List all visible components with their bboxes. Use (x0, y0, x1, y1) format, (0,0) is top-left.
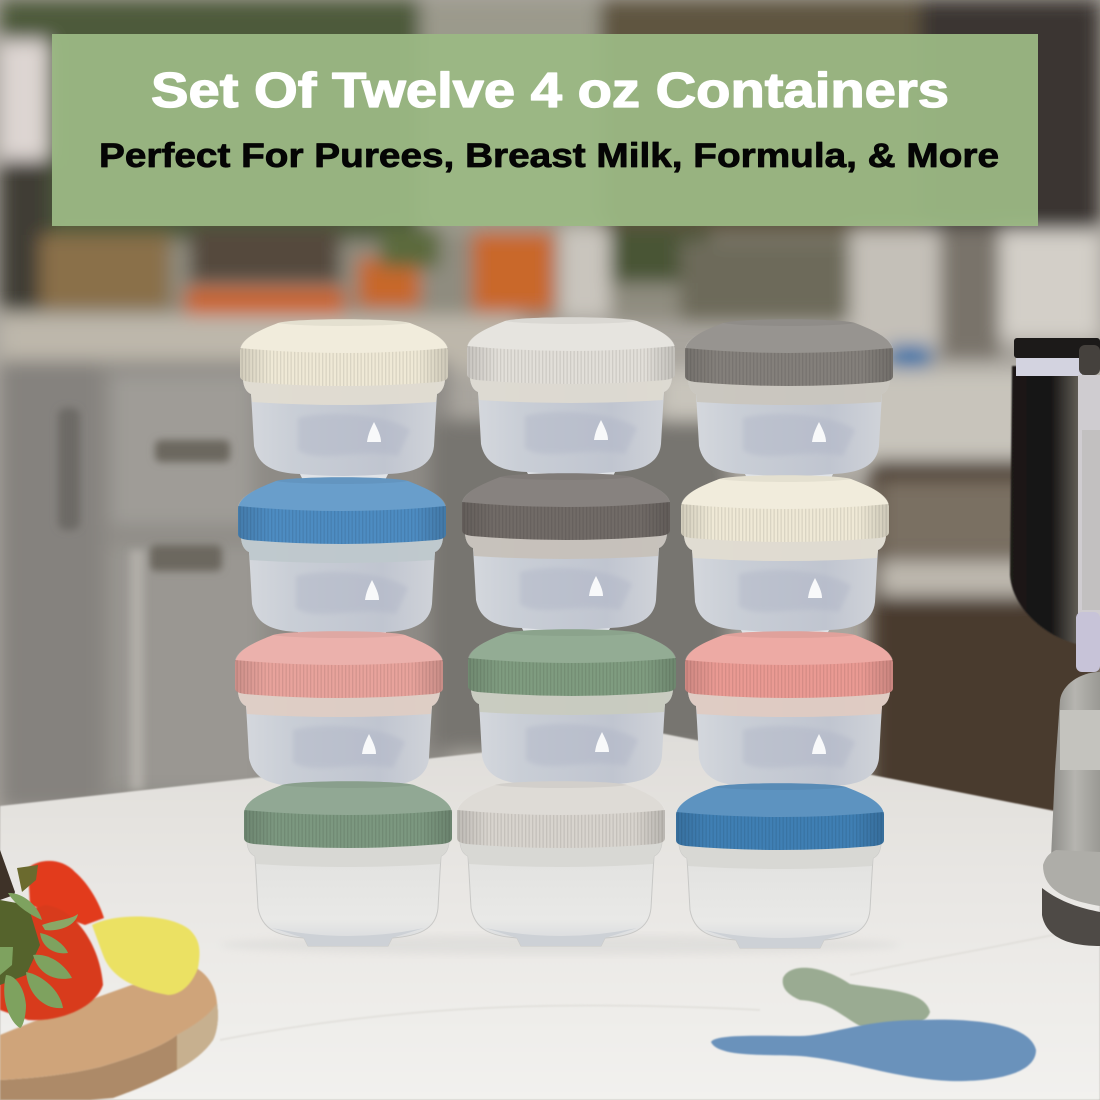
container: row 4 light gray (457, 781, 665, 946)
container: row 4 green (244, 781, 452, 946)
banner panel (52, 34, 1038, 226)
strawberry leaves (0, 850, 78, 1028)
container: row 4 blue (676, 783, 884, 948)
container stacks (235, 317, 893, 948)
container: row 3 pink (235, 631, 443, 794)
container: row 3 green (468, 629, 676, 792)
blue silicone spoon (711, 1020, 1036, 1081)
blender (1010, 338, 1100, 946)
pineapple chunk (92, 917, 199, 995)
container: row 1 off-white (467, 317, 675, 480)
container: row 1 cream (240, 319, 448, 482)
strawberries (0, 861, 104, 1020)
container: row 2 blue (238, 477, 446, 640)
subtitle: Perfect For Purees, Breast Milk, Formula, & More (99, 137, 999, 175)
wooden board (0, 965, 218, 1100)
container: row 1 gray (685, 319, 893, 482)
container: row 2 dark gray (462, 473, 670, 636)
title: Set Of Twelve 4 oz Containers (151, 64, 949, 118)
blender handle (1010, 366, 1082, 645)
container: row 2 cream (681, 475, 889, 638)
marble island counter (0, 733, 1100, 1100)
fruit on wooden board (0, 850, 218, 1100)
green silicone spoon (783, 968, 930, 1028)
container: row 3 pink right (685, 631, 893, 794)
